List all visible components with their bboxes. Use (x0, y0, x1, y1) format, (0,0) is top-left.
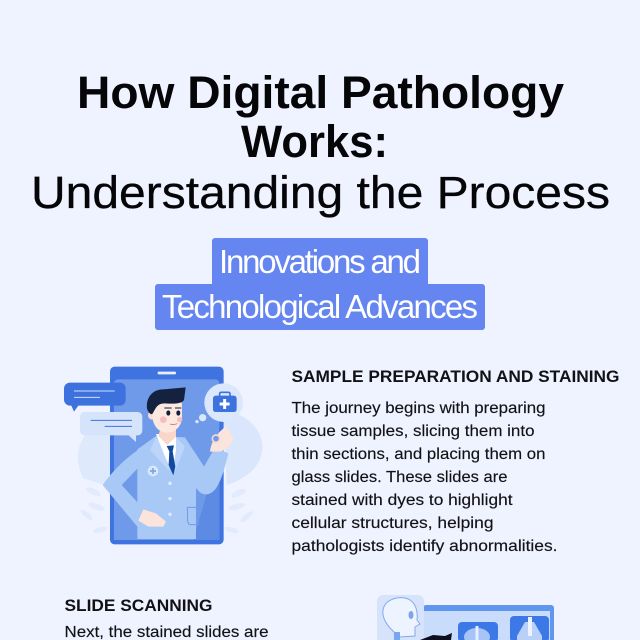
chat bubble dark (64, 383, 126, 412)
raised hand (210, 426, 233, 452)
body: sample preparation: glass slides. These slides are (292, 469, 508, 486)
lapels and shirt (150, 437, 170, 472)
subtitle highlight: Technological Advances (162, 288, 478, 325)
section 2 (64, 597, 269, 640)
body: sample preparation (292, 400, 558, 555)
title (31, 67, 610, 218)
x-ray tile: chest (458, 622, 498, 640)
body: sample preparation: cellular structures, helping (292, 515, 494, 532)
hand on hip (138, 509, 166, 527)
body: sample preparation: tissue samples, slicing them into (292, 423, 535, 440)
hair (147, 387, 186, 414)
illustration: doctor on phone (64, 367, 262, 544)
title: How Digital Pathology (77, 67, 564, 118)
body: sample preparation: The journey begins with preparing (292, 400, 546, 417)
x-ray tile: spine (510, 616, 549, 640)
section 1 (292, 368, 620, 555)
thought bubble with medical case (195, 383, 243, 423)
dark object (420, 633, 452, 640)
illustration: x-ray board (377, 595, 554, 640)
heading: slide scanning: SLIDE SCANNING (64, 597, 212, 615)
body: sample preparation: pathologists identify abnormalities. (292, 538, 558, 555)
chat bubble light (80, 412, 142, 442)
heading: sample preparation: SAMPLE PREPARATION AND STAINING (292, 368, 620, 386)
torso (137, 436, 204, 539)
background blobs and leaves (78, 410, 262, 534)
icon: skull (383, 598, 420, 640)
title: Works: (241, 116, 388, 167)
tie (167, 445, 175, 475)
subtitle highlight (155, 238, 485, 330)
coat details (148, 466, 158, 476)
left arm (103, 444, 147, 527)
doctor (103, 387, 233, 539)
body: sample preparation: stained with dyes to highlight (292, 492, 513, 509)
neck and head (158, 425, 176, 445)
title: Understanding the Process (31, 167, 610, 218)
body: sample preparation: thin sections, and placing them on (292, 446, 546, 463)
right arm (193, 447, 228, 494)
phone (110, 367, 224, 544)
subtitle highlight: Innovations and (219, 243, 421, 280)
